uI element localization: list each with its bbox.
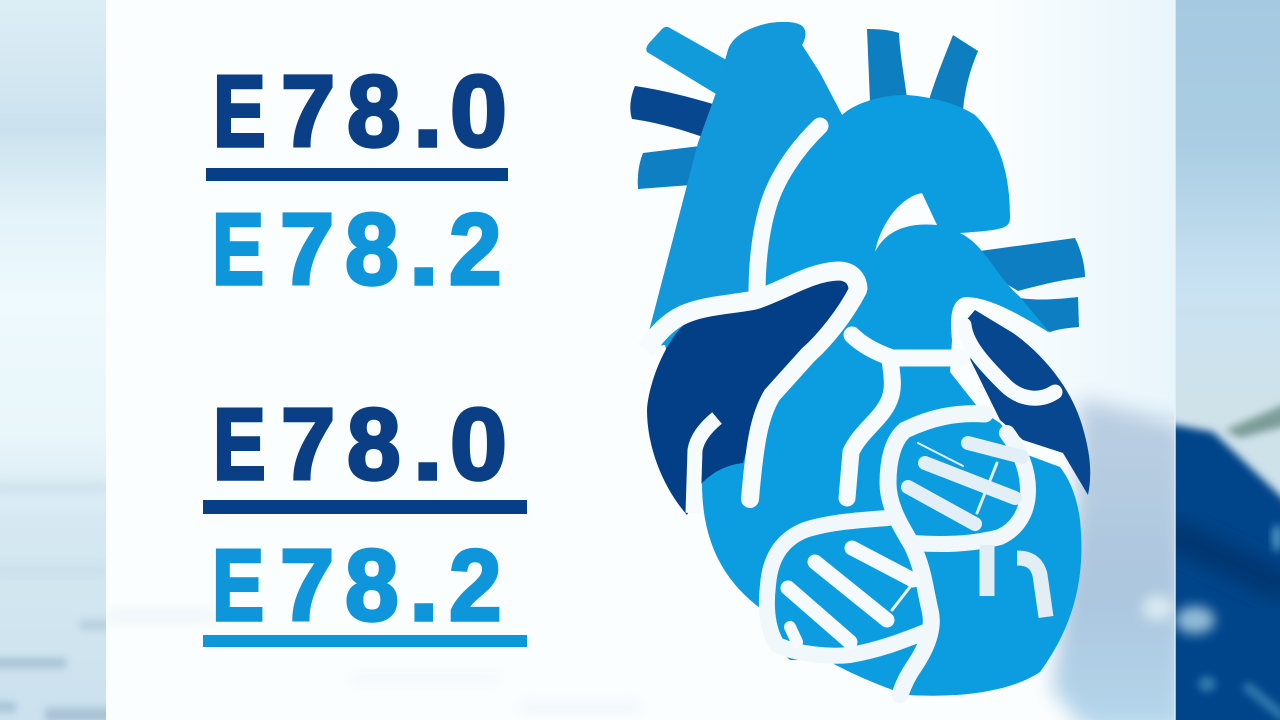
vessel: upper left light: [646, 27, 730, 94]
white crescent opening: [875, 193, 937, 252]
panel edge line: [1174, 0, 1176, 720]
code: E78.0 top: E: [213, 54, 266, 168]
code: E78.0 top: .: [413, 54, 443, 168]
code: E78.0 bottom: .: [413, 387, 443, 501]
vessel: left mid blue: [638, 146, 700, 189]
code: E78.0 bottom: 0: [450, 387, 507, 501]
white vessel outlines: [645, 126, 1055, 513]
DNA helix: [767, 414, 1046, 695]
icon: heart with DNA helix: [630, 22, 1090, 696]
blurred background: left band: [0, 0, 115, 720]
code: E78.2 top: 7: [280, 192, 334, 306]
code: E78.0 bottom: [213, 387, 507, 501]
blurred background: right band: [1165, 0, 1280, 720]
panel: ICD codes: [203, 54, 527, 647]
divider: navy rule: [206, 168, 508, 181]
left body tint: [645, 22, 842, 347]
divider: navy rule lower: [203, 500, 527, 514]
code: E78.2 top: [212, 192, 502, 306]
code: E78.2 top: .: [409, 192, 439, 306]
stubs below helix: [987, 545, 1046, 617]
chamber: left navy: [647, 280, 851, 515]
heart body: [645, 22, 1081, 696]
code: E78.0 bottom: 8: [347, 387, 401, 501]
code: E78.2 top: 2: [449, 192, 502, 306]
code: E78.2 bottom: [212, 528, 502, 642]
code: E78.2 bottom: 8: [345, 528, 399, 642]
code: E78.2 top: 8: [345, 192, 399, 306]
divider: blue rule lower: [203, 635, 527, 647]
code: E78.2 bottom: 7: [280, 528, 334, 642]
vessel: top pair: [867, 29, 978, 110]
code: E78.2 bottom: E: [212, 528, 264, 642]
code: E78.0 bottom: 7: [281, 387, 335, 501]
code: E78.0 bottom: E: [213, 387, 266, 501]
code: E78.0 top: [213, 54, 507, 168]
code: E78.0 top: 0: [450, 54, 507, 168]
code: E78.2 bottom: .: [409, 528, 439, 642]
DNA rungs lower loop: [788, 548, 913, 642]
chamber: right navy: [962, 310, 1090, 495]
vessel: right pair: [980, 238, 1085, 332]
DNA rungs upper loop: [908, 443, 1022, 524]
code: E78.2 bottom: 2: [449, 528, 502, 642]
code: E78.0 top: 7: [281, 54, 335, 168]
vessel: left navy: [630, 86, 716, 137]
code: E78.0 top: 8: [347, 54, 401, 168]
code: E78.2 top: E: [212, 192, 264, 306]
